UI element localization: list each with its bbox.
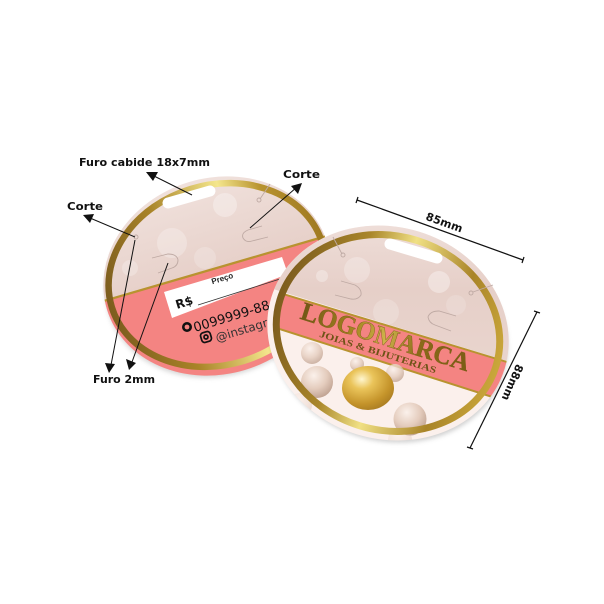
gold ring	[85, 157, 349, 393]
arrow: furo right	[126, 263, 168, 370]
label: corte right: Corte	[283, 168, 320, 181]
tagline: JOIAS & BIJUTERIAS	[318, 330, 437, 376]
gold pearl	[342, 366, 394, 410]
currency label: R$	[174, 293, 195, 312]
arrow: furo left	[105, 240, 135, 373]
logo: LOGOMARCA	[297, 297, 474, 377]
whatsapp icon	[182, 322, 192, 332]
label: 85mm: 85mm	[424, 210, 464, 235]
label: furo cabide: Furo cabide 18x7mm	[79, 156, 210, 169]
pink lower section	[104, 240, 318, 376]
label: furo 2mm: Furo 2mm	[93, 373, 155, 386]
gold ring	[252, 207, 524, 459]
hanger slot	[390, 244, 437, 258]
arrow: hanger hole	[146, 172, 192, 195]
dimension: width	[356, 197, 524, 263]
pearls	[295, 342, 426, 440]
dimension: height	[467, 311, 540, 449]
price label: Preço	[210, 271, 234, 286]
label: corte left: Corte	[67, 200, 103, 213]
instagram handle: @instagram	[214, 310, 288, 345]
panel: back of tag	[103, 176, 326, 380]
phone number: 0099999-88	[192, 298, 272, 336]
panel: front of tag	[267, 226, 510, 444]
cut slits	[333, 237, 493, 331]
instagram icon	[200, 331, 212, 343]
label: 88mm: 88mm	[499, 362, 526, 403]
price line	[198, 279, 280, 305]
pink band	[280, 296, 506, 396]
band edges	[280, 294, 507, 398]
arrow: corte right	[250, 183, 302, 228]
price box	[164, 257, 288, 318]
gold divider	[104, 235, 326, 302]
hanger slot	[168, 191, 210, 203]
arrow: corte left	[83, 214, 135, 237]
cut slits	[134, 184, 270, 273]
